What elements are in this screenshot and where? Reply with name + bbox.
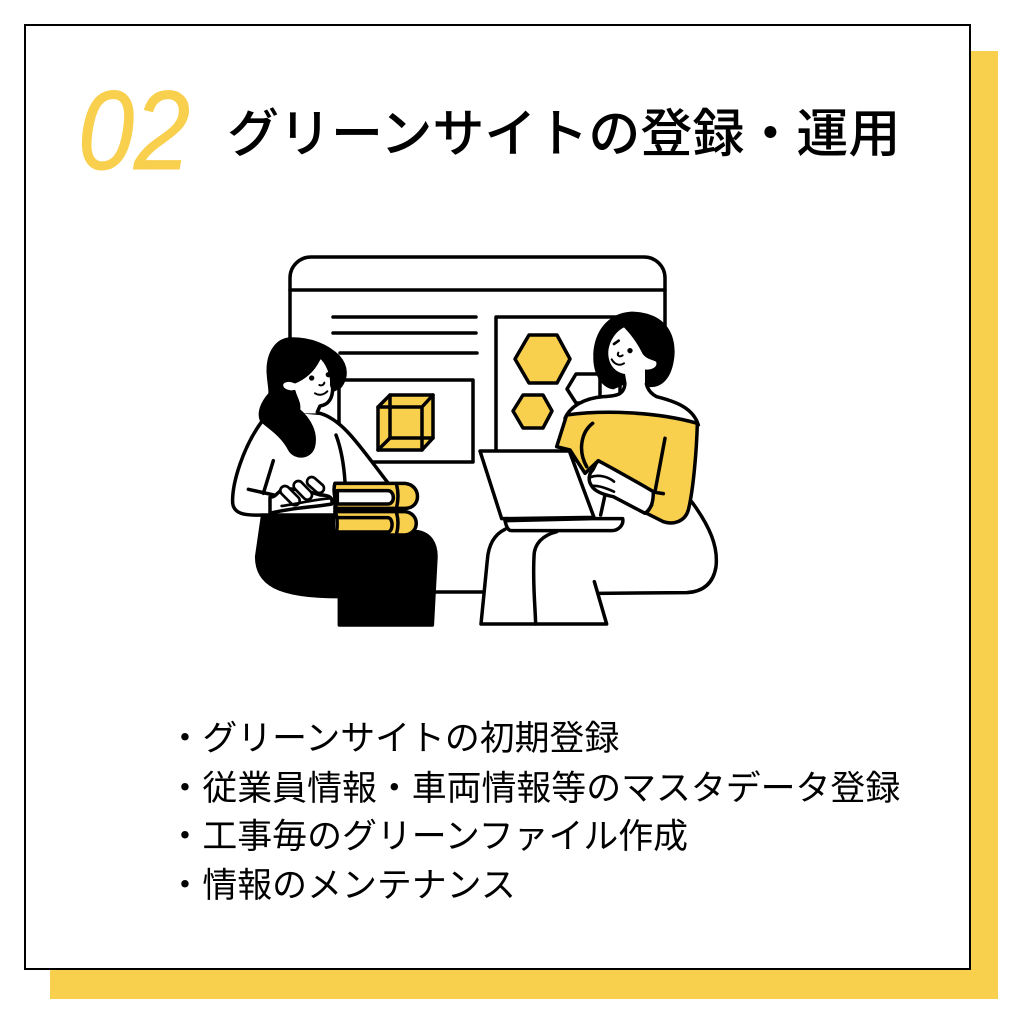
right content panel with hexagons [496,317,620,460]
list item 4: ・情報のメンテナンス [168,866,516,905]
seat and legs [481,502,716,624]
neck and shoulders [565,368,698,425]
face [608,327,656,383]
laptop [480,451,594,519]
sweater [233,412,388,515]
hair [593,312,675,389]
bullet list [168,719,900,905]
hair [260,339,345,456]
face [281,353,333,413]
hand [589,461,653,513]
list item 1: ・グリーンサイトの初期登録 [168,719,619,758]
books [334,483,417,508]
trousers [257,515,436,625]
browser window [290,257,665,592]
left content panel with cube [339,380,473,462]
woman on the left [233,339,436,625]
yellow off-shoulder top [557,412,697,523]
step number: 02 [78,68,190,193]
list item 2: ・従業員情報・車両情報等のマスタデータ登録 [168,769,900,808]
woman on the right [480,312,716,624]
hand [270,482,332,513]
title: グリーンサイトの登録・運用 [227,106,900,164]
list item 3: ・工事毎のグリーンファイル作成 [168,817,688,856]
